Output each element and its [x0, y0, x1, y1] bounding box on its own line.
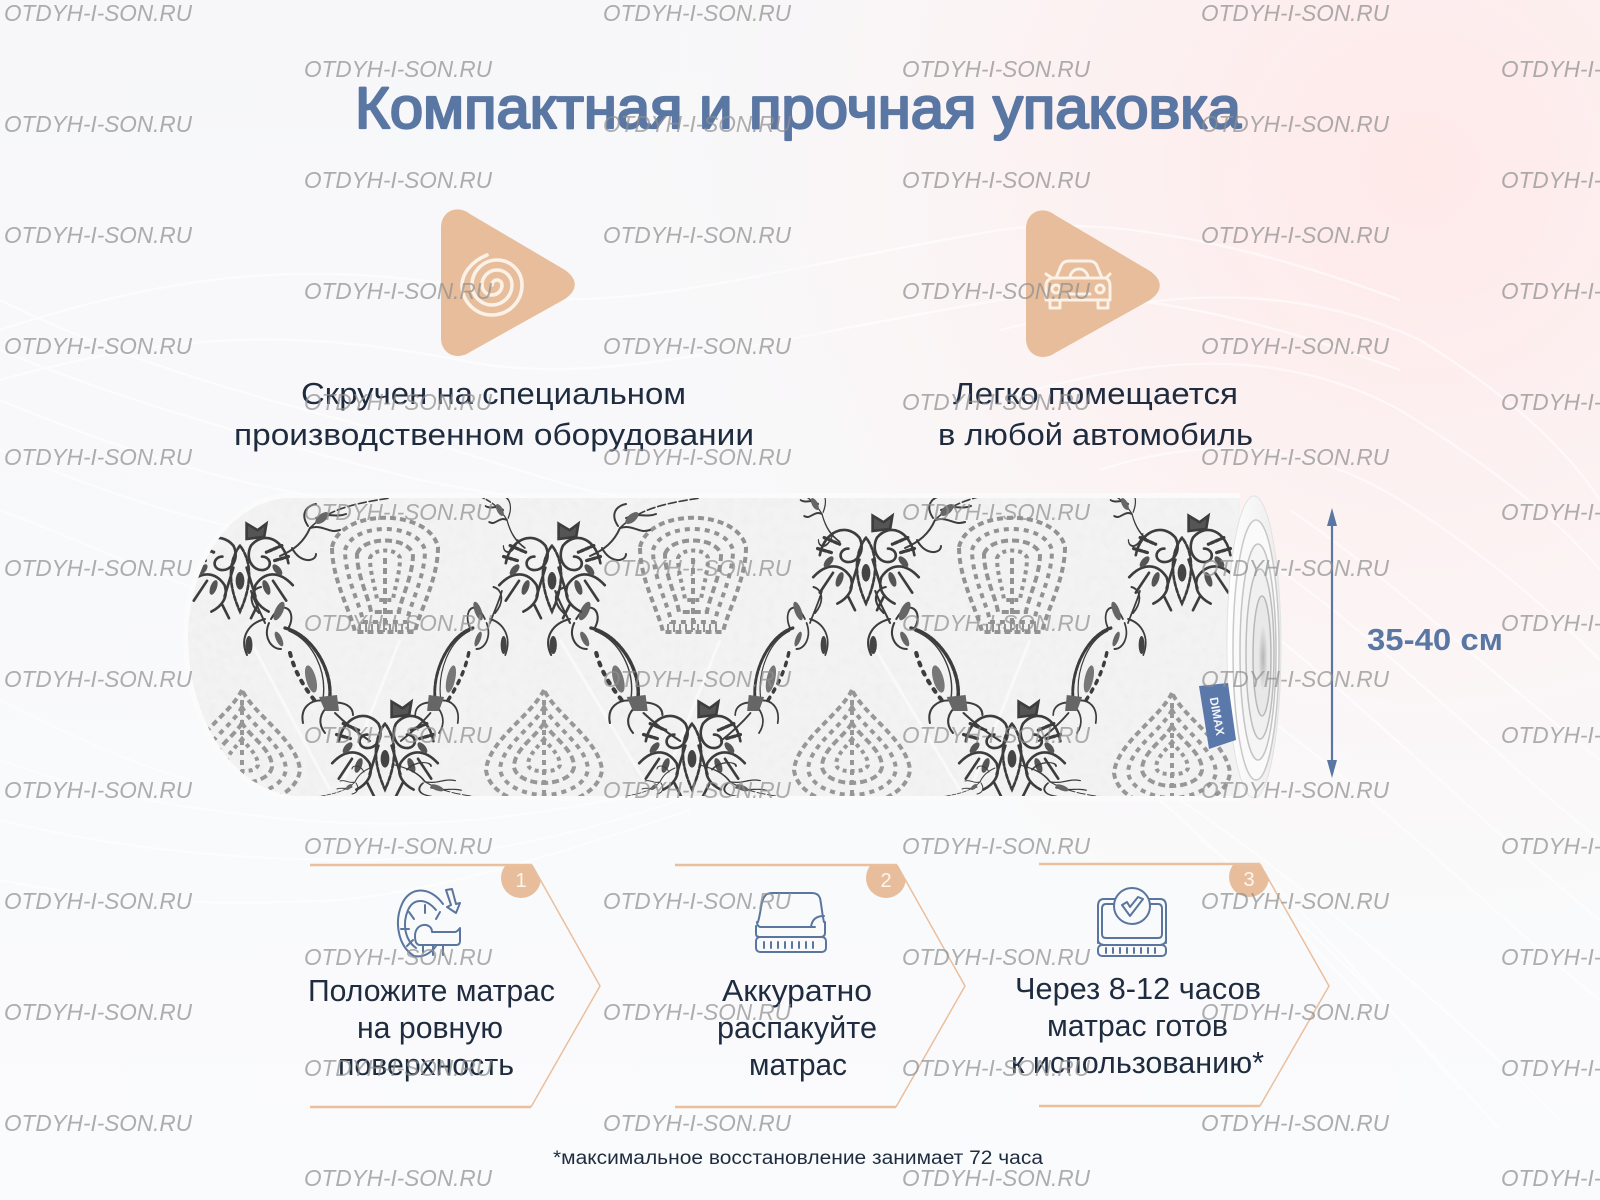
watermarks: OTDYH-I-SON.RU: [902, 499, 1090, 525]
watermarks: OTDYH-I-SON.RU: [4, 444, 192, 470]
white halo: [183, 493, 1240, 801]
watermarks: OTDYH-I-SON.RU: [4, 777, 192, 803]
step 3: [1011, 857, 1329, 1106]
step text: Аккуратно: [722, 973, 872, 1008]
icon: mattress with check mark: [1098, 888, 1166, 956]
watermarks: OTDYH-I-SON.RU: [304, 610, 492, 636]
watermarks: OTDYH-I-SON.RU: [304, 56, 492, 82]
step text: к использованию*: [1011, 1045, 1264, 1080]
step text: [717, 973, 877, 1082]
watermarks: OTDYH-I-SON.RU: [4, 0, 192, 26]
text: rolled caption: Скручен на специальном: [301, 376, 686, 411]
watermarks: OTDYH-I-SON.RU: [902, 944, 1090, 970]
footnote: *максимальное восстановление занимает 72 часа: [553, 1148, 1043, 1169]
text: rolled caption: [234, 376, 754, 452]
watermarks: OTDYH-I-SON.RU: [4, 222, 192, 248]
step text: матрас готов: [1047, 1008, 1228, 1043]
feature: rolled on special equipment: [234, 209, 754, 452]
watermarks: OTDYH-I-SON.RU: [603, 666, 791, 692]
size label: 35-40 см: [1367, 622, 1503, 657]
number: 2: [880, 870, 892, 892]
watermarks: OTDYH-I-SON.RU: [304, 389, 492, 415]
watermarks: OTDYH-I-SON.RU: [902, 167, 1090, 193]
watermarks: OTDYH-I-SON.RU: [603, 888, 791, 914]
brand tag: DIMAX: [1207, 696, 1227, 737]
watermarks: OTDYH-I-SON.RU: [4, 666, 192, 692]
watermarks: OTDYH-I-SON.RU: [1201, 888, 1389, 914]
icon: triangle with spiral: [441, 209, 575, 356]
title: Компактная и прочная упаковка: [355, 76, 1242, 141]
watermarks: OTDYH-I-SON.RU: [4, 555, 192, 581]
watermarks: OTDYH-I-SON.RU: [902, 1165, 1090, 1191]
step text: на ровную: [357, 1010, 503, 1045]
step 1: [308, 858, 600, 1107]
watermarks: OTDYH-I-SON.RU: [902, 1055, 1090, 1081]
text: car caption: Легко помещается: [953, 376, 1238, 411]
watermarks: OTDYH-I-SON.RU: [603, 0, 791, 26]
chevron frame: [310, 858, 600, 1107]
watermarks: OTDYH-I-SON.RU: [1201, 111, 1389, 137]
step text: [1011, 971, 1264, 1080]
watermarks: OTDYH-I-SON.RU: [1201, 555, 1389, 581]
number: 1: [515, 870, 527, 892]
icon: triangle with car: [1026, 210, 1160, 357]
watermarks: OTDYH-I-SON.RU: [603, 333, 791, 359]
text: car caption: [938, 376, 1253, 452]
watermarks: OTDYH-I-SON.RU: [603, 999, 791, 1025]
step text: [308, 973, 555, 1082]
watermarks: OTDYH-I-SON.RU: [304, 944, 492, 970]
watermarks: OTDYH-I-SON.RU: [603, 555, 791, 581]
watermarks: OTDYH-I-SON.RU: [902, 389, 1090, 415]
watermarks: OTDYH-I-SON.RU: [304, 167, 492, 193]
watermarks: OTDYH-I-SON.RU: [902, 833, 1090, 859]
watermarks: OTDYH-I-SON.RU: [4, 1110, 192, 1136]
watermarks: OTDYH-I-SON.RU: [902, 610, 1090, 636]
step 2: [675, 858, 965, 1107]
forward trellis: [244, 587, 370, 741]
watermarks: OTDYH-I-SON.RU: [304, 278, 492, 304]
watermarks: OTDYH-I-SON.RU: [304, 1165, 492, 1191]
watermarks: OTDYH-I-SON.RU: [304, 833, 492, 859]
size arrow: [1327, 508, 1337, 778]
watermarks: OTDYH-I-SON.RU: [4, 111, 192, 137]
watermarks: OTDYH-I-SON.RU: [1201, 0, 1389, 26]
text: car caption: в любой автомобиль: [938, 417, 1253, 452]
watermarks: OTDYH-I-SON.RU: [902, 56, 1090, 82]
watermarks: OTDYH-I-SON.RU: [1201, 777, 1389, 803]
rolled mattress: [180, 484, 1281, 810]
backward trellis: [401, 587, 508, 741]
watermarks: OTDYH-I-SON.RU: [304, 1055, 492, 1081]
watermarks: OTDYH-I-SON.RU: [1201, 666, 1389, 692]
watermarks: OTDYH-I-SON.RU: [304, 499, 492, 525]
lower tails: [394, 762, 474, 796]
number: 3: [1243, 869, 1255, 891]
rolled end with concentric layers: [1227, 496, 1281, 798]
watermarks: OTDYH-I-SON.RU: [603, 777, 791, 803]
watermarks: OTDYH-I-SON.RU: [603, 111, 791, 137]
watermarks: OTDYH-I-SON.RU: [1201, 1110, 1389, 1136]
watermarks: OTDYH-I-SON.RU: [1201, 999, 1389, 1025]
chevron frame: [1039, 857, 1329, 1106]
icon: unrolling mattress: [398, 889, 460, 956]
icon: unpacked mattress: [756, 893, 826, 952]
watermarks: OTDYH-I-SON.RU: [603, 1110, 791, 1136]
watermarks: OTDYH-I-SON.RU: [4, 999, 192, 1025]
watermarks: OTDYH-I-SON.RU: [4, 333, 192, 359]
watermarks: OTDYH-I-SON.RU: [1201, 222, 1389, 248]
lower knots: [332, 702, 438, 796]
watermarks: OTDYH-I-SON.RU: [603, 222, 791, 248]
chevron frame: [675, 858, 965, 1107]
mattress body with damask pattern: [188, 498, 1240, 796]
watermarks: OTDYH-I-SON.RU: [304, 722, 492, 748]
step text: Положите матрас: [308, 973, 555, 1008]
step text: поверхность: [338, 1047, 514, 1082]
brand tag: [1199, 683, 1236, 749]
step text: Через 8-12 часов: [1015, 971, 1261, 1006]
step text: матрас: [749, 1047, 847, 1082]
feature: fits any car: [938, 210, 1253, 452]
text: rolled caption: производственном оборудовании: [234, 417, 754, 452]
upper tails: [280, 498, 390, 560]
watermarks: OTDYH-I-SON.RU: [1201, 444, 1389, 470]
watermarks: OTDYH-I-SON.RU: [603, 444, 791, 470]
watermarks: OTDYH-I-SON.RU: [902, 722, 1090, 748]
watermarks: OTDYH-I-SON.RU: [4, 888, 192, 914]
upper knots: [187, 524, 293, 618]
step text: распакуйте: [717, 1010, 877, 1045]
watermarks: OTDYH-I-SON.RU: [1201, 333, 1389, 359]
watermarks: OTDYH-I-SON.RU: [902, 278, 1090, 304]
